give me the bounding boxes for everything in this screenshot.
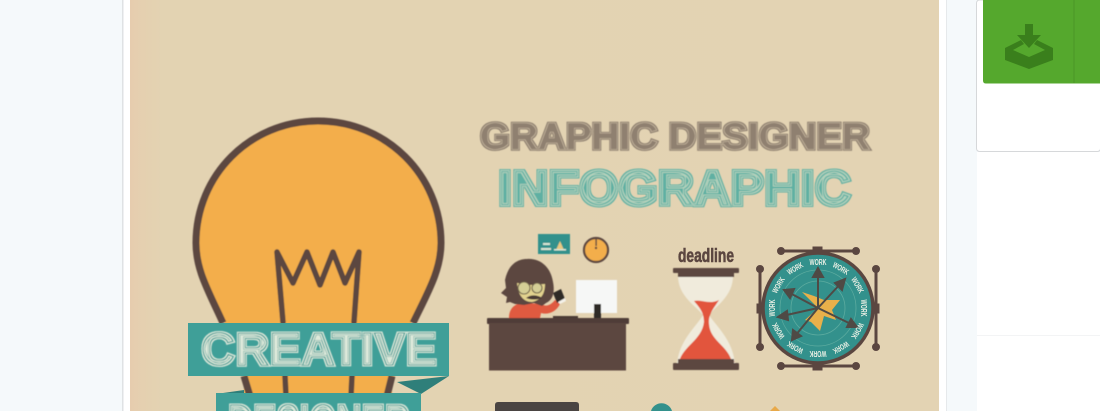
illustration: hourglass [673, 246, 739, 370]
icon: desk [487, 316, 629, 370]
banner: creative [188, 323, 449, 394]
illustration: work wheel [756, 247, 880, 370]
wheel disc [763, 253, 873, 363]
WORK labels: WORK [770, 321, 787, 340]
icon: download tray [1005, 24, 1053, 69]
WORK labels: WORK [849, 276, 866, 295]
heading: graphic designer: GRAPHIC DESIGNER [480, 116, 870, 157]
WORK labels: WORK [786, 260, 805, 277]
sidebar card [976, 0, 1100, 411]
icon: wall clock [584, 238, 608, 262]
WORK labels: WORK [768, 299, 777, 316]
icon: orange tip [770, 406, 780, 411]
WORK labels: WORK [849, 321, 866, 340]
heading: infographic: INFOGRAPHIC [498, 162, 851, 216]
WORK labels: WORK [831, 339, 850, 356]
lower icons, cropped [495, 402, 780, 411]
icon: teal circle [651, 403, 672, 411]
orange star [802, 292, 840, 331]
icon: monitor [576, 280, 617, 319]
main content column [122, 0, 947, 411]
wheel frame handles [756, 247, 880, 370]
icon: designer character [501, 259, 566, 318]
icon: light bulb [196, 121, 441, 396]
WORK labels: WORK [809, 349, 826, 358]
icon: hourglass shape [673, 268, 739, 370]
WORK labels: WORK [786, 339, 805, 356]
arrows [778, 268, 857, 340]
download button [983, 0, 1100, 84]
icon: dark panel [495, 402, 579, 411]
illustration: designer at desk [487, 234, 629, 370]
WORK labels: WORK [859, 300, 868, 317]
icon: wall picture [538, 234, 570, 254]
banner: designer [216, 393, 421, 411]
icon: bulb filament [277, 252, 359, 396]
panel: infographic poster [130, 0, 939, 411]
WORK labels: WORK [770, 276, 787, 295]
WORK labels: WORK [831, 260, 850, 277]
WORK labels: WORK [810, 258, 827, 267]
banner: creative: CREATIVE [201, 323, 437, 375]
WORK labels [768, 258, 868, 358]
label: deadline: deadline [678, 246, 734, 267]
